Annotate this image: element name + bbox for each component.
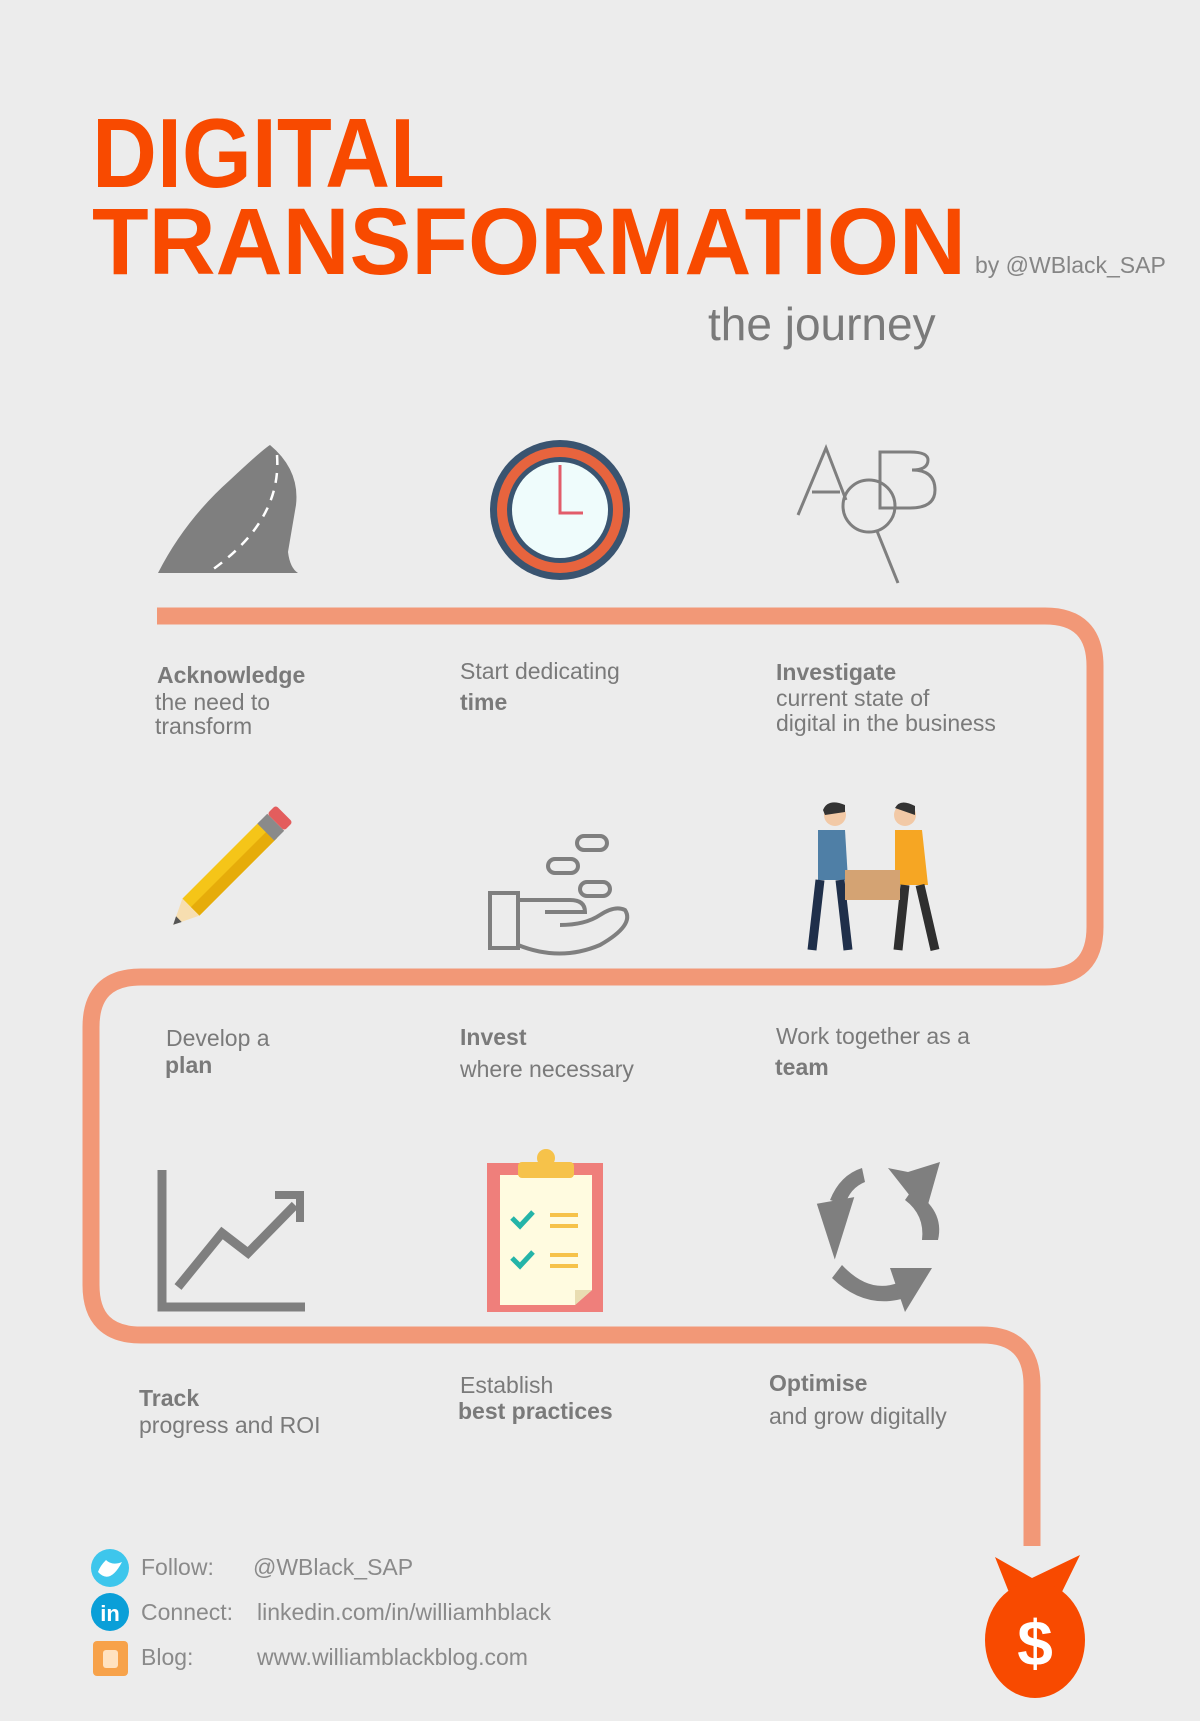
icon: road bbox=[158, 445, 298, 573]
text: invest: Invest bbox=[460, 1024, 527, 1050]
text: best practices bbox=[458, 1372, 613, 1424]
title: TRANSFORMATION bbox=[92, 189, 966, 295]
text: acknowledge: Acknowledge bbox=[157, 662, 305, 688]
icon: money bag: $ bbox=[1017, 1607, 1053, 1679]
text: optimise: Optimise bbox=[769, 1370, 867, 1396]
text: investigate: current state of bbox=[776, 685, 930, 711]
footer: twitter bbox=[91, 1549, 413, 1587]
subtitle: the journey bbox=[708, 298, 936, 350]
text: time bbox=[460, 658, 620, 715]
text: track bbox=[139, 1385, 321, 1438]
text: time: time bbox=[460, 689, 507, 715]
footer: twitter: Follow: bbox=[141, 1554, 214, 1580]
text: invest: where necessary bbox=[459, 1056, 634, 1082]
icon: teamwork bbox=[812, 802, 935, 950]
text: team bbox=[775, 1023, 970, 1080]
icon: money bag bbox=[985, 1555, 1085, 1698]
text: investigate: Investigate bbox=[776, 659, 896, 685]
text: plan: plan bbox=[165, 1052, 212, 1078]
text: track: progress and ROI bbox=[139, 1412, 321, 1438]
text: plan: Develop a bbox=[166, 1025, 270, 1051]
footer: blog bbox=[93, 1641, 528, 1676]
icon: hand with coins bbox=[490, 836, 627, 954]
text: plan bbox=[165, 1025, 270, 1078]
footer: blog: www.williamblackblog.com bbox=[256, 1644, 528, 1670]
text: investigate bbox=[776, 659, 996, 736]
icon: clipboard bbox=[487, 1149, 603, 1312]
text: acknowledge: the need to bbox=[155, 689, 270, 715]
title: DIGITAL bbox=[92, 98, 445, 208]
text: investigate: digital in the business bbox=[776, 710, 996, 736]
text: optimise: and grow digitally bbox=[769, 1403, 947, 1429]
footer: linkedin: Connect: bbox=[141, 1599, 233, 1625]
journey path bbox=[91, 616, 1095, 1546]
byline: by @WBlack_SAP bbox=[975, 252, 1166, 278]
footer: linkedin: in bbox=[100, 1601, 120, 1626]
icon: pencil bbox=[165, 805, 293, 933]
icon: chart bbox=[162, 1170, 305, 1307]
title bbox=[92, 98, 966, 295]
icon: A B magnifier bbox=[798, 448, 935, 583]
icon: cycle arrows bbox=[817, 1162, 940, 1312]
text: track: Track bbox=[139, 1385, 199, 1411]
text: acknowledge: transform bbox=[155, 713, 252, 739]
text: time: Start dedicating bbox=[460, 658, 620, 684]
footer: twitter: @WBlack_SAP bbox=[253, 1554, 413, 1580]
text: best practices: Establish bbox=[460, 1372, 553, 1398]
text: team: team bbox=[775, 1054, 829, 1080]
text: acknowledge bbox=[155, 662, 305, 739]
icon: clock bbox=[490, 440, 630, 580]
footer: linkedin: linkedin.com/in/williamhblack bbox=[257, 1599, 552, 1625]
footer: linkedin bbox=[91, 1593, 552, 1631]
text: team: Work together as a bbox=[776, 1023, 970, 1049]
text: best practices: best practices bbox=[458, 1398, 613, 1424]
footer: blog: Blog: bbox=[141, 1644, 193, 1670]
text: invest bbox=[459, 1024, 634, 1082]
text: optimise bbox=[769, 1370, 947, 1429]
